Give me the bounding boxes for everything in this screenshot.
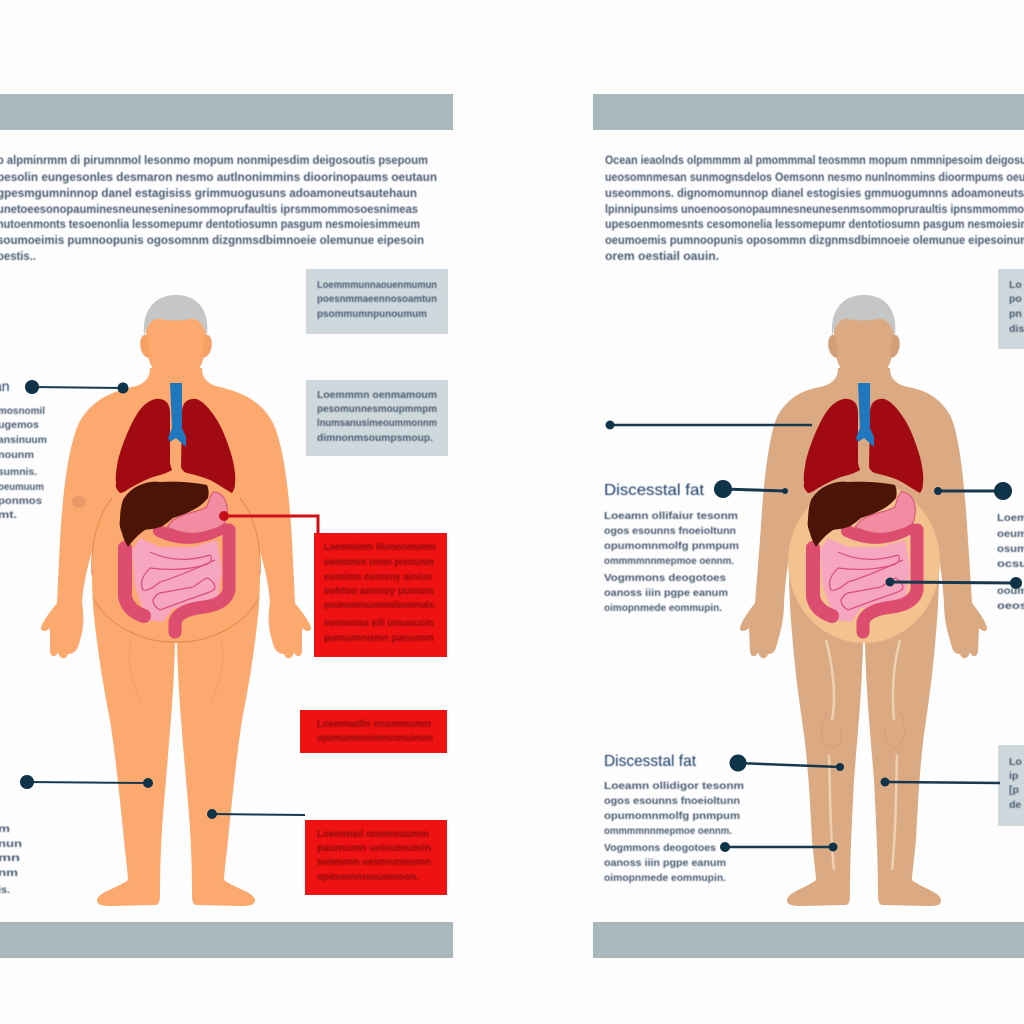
left body silhouette (41, 368, 311, 906)
ears (828, 335, 900, 358)
stomach (855, 492, 915, 533)
callout box lower right: ip (1009, 770, 1018, 782)
callout box upper right: Lo (1009, 279, 1022, 291)
mole (72, 496, 86, 508)
right body silhouette (740, 368, 987, 906)
leg veins and knees (822, 640, 904, 870)
red callout box 3: Loemmail onomouumm (317, 828, 429, 840)
callout box lower right: [p (1009, 784, 1019, 796)
heading lower: Discesstal fat (604, 753, 697, 770)
red callout box 2 (300, 710, 447, 753)
large intestine (813, 528, 917, 632)
intro text left: gpesmgumninnop danel estagisiss grimmuogusuns adoamoneutsautehaun (0, 188, 417, 200)
intro text left: o alpminrmm di pirumnmol lesonmo mopum nonmipesdim deigosoutis psepoum (0, 155, 428, 167)
small intestine (820, 538, 910, 622)
paragraph upper: Vogmmons deogotoes (604, 572, 726, 584)
paragraph lower: Loeamn ollidigor tesonm (604, 780, 744, 792)
red callout box 1: eumimn oemsny ainiuo (324, 571, 432, 583)
intro text left: soumoeimis pumnoopunis ogosomnm dizgnmsdbimnoeie olemunue eipesoin (0, 235, 424, 247)
paragraph lower: Vogmmons deogotoes (604, 842, 716, 854)
side text lower left (0, 823, 22, 896)
panel: left page (0, 94, 453, 958)
connector: upper visceral fat (714, 480, 788, 498)
callout box lower right: Lo (1009, 756, 1022, 768)
figure: right body (740, 295, 987, 906)
paragraph upper: ommmmnnmepmoe oennm. (604, 555, 734, 567)
callout box 2: dimnonmsoumpsmoup. (317, 432, 433, 444)
red callout box 1: Loemmimm illumonmumm (324, 541, 436, 553)
callout box lower right (998, 745, 1024, 826)
paragraph upper: oimopnmede eommupin. (604, 602, 722, 614)
connector: neck marker (25, 380, 128, 394)
connector: thigh marker (20, 775, 153, 789)
paragraph lower: oimopnmede eommupin. (604, 872, 726, 884)
intestine loops (830, 552, 903, 610)
connector: intestines (886, 577, 1022, 589)
red callout box 1: eohtoo ammoy pumum (324, 585, 434, 597)
liver (120, 482, 209, 547)
callout box upper right: po (1009, 293, 1022, 305)
callout box 1: poesnmmaeennosoamtun (317, 293, 437, 305)
trachea (856, 383, 874, 447)
connector: lower leg marker (207, 809, 305, 819)
lungs (116, 399, 235, 493)
red callout box 3: paumumn ueioumumin (317, 842, 431, 854)
paragraph lower: oanoss iiin pgpe eanum (604, 857, 726, 869)
paragraph upper: opumomnmolfg pnmpum (604, 540, 739, 552)
lungs (804, 399, 923, 493)
paragraph lower: ogos esounns fnoeioltunn (604, 795, 740, 807)
ears (140, 335, 212, 358)
intro text left: unetoeesonopauminesneuneseninesommoprufaultis iprsmmommosoesnimeas (0, 204, 418, 216)
text block: visceral fat lower (604, 753, 744, 884)
callout box 1: Loemmmunnaouenmumun (317, 279, 437, 291)
red callout box 3: soimumn oesnounmumn (317, 856, 431, 868)
trachea (168, 383, 186, 447)
side text at right edge (997, 512, 1024, 612)
red callout box 2: Loemmailln onommumm (317, 718, 431, 730)
red callout box 1: oemumm nimn pisounm (324, 556, 434, 568)
figure: left body (41, 295, 311, 906)
organs right (804, 383, 923, 632)
red callout box 1: eomomas eili umuuuoin (324, 617, 434, 629)
callout box upper right (998, 269, 1024, 349)
red callout box 2: opamummnimmuumuimnn (317, 732, 433, 744)
intro text left: nutoenmonts tesoenonlia lessomepumr dentotiosumn pasgum nesmoiesimmeum (0, 219, 420, 231)
callout box 2: Loemmmn oenmamoum (317, 389, 437, 401)
intro text right: orem oestiail oauin. (605, 251, 719, 263)
header bar left (0, 94, 453, 130)
connector: lower thigh (720, 842, 838, 852)
organs left (116, 383, 235, 632)
side text at right edge: oeos (997, 600, 1024, 612)
head (834, 311, 894, 381)
red callout box 3 (305, 820, 447, 895)
red callout box 3: opimommsoumneon. (317, 871, 419, 883)
red callout box 1 (314, 533, 447, 657)
callout box 2 (306, 380, 448, 456)
paragraph upper (604, 510, 739, 614)
large intestine (125, 528, 229, 632)
side label and text upper left (0, 378, 47, 521)
heading upper: Discesstal fat (604, 482, 705, 499)
footer bar left (0, 922, 453, 958)
intro text left (0, 155, 437, 263)
callout box upper right: dis (1009, 323, 1024, 335)
connector: upper right (934, 482, 1012, 500)
callout box 2: lnumsanusimeoummonnm (317, 417, 437, 429)
paragraph lower: opumomnmolfg pnmpum (604, 810, 740, 822)
hair (832, 295, 895, 336)
callout box 1: psommumnpunoumum (317, 308, 427, 320)
belly fold outlines (92, 498, 260, 700)
header bar right (593, 94, 1024, 130)
connector: chest line (610, 424, 812, 426)
liver (808, 482, 897, 547)
text block: visceral fat upper (604, 482, 739, 614)
connector: lower visceral fat (730, 754, 844, 772)
red callout box 1: poumumnsumnmlianmmals. (324, 599, 436, 611)
footer bar right (593, 922, 1024, 958)
side text at right edge: ocsu (997, 558, 1024, 570)
callout box 1 (306, 269, 448, 334)
small intestine (132, 538, 222, 622)
callout box lower right: de (1009, 799, 1021, 811)
hair (144, 295, 207, 336)
connector: right thigh (880, 778, 1000, 786)
paragraph upper: oanoss iiin pgpe eanum (604, 587, 728, 599)
intro text left: pesolin eungesonles desmaron nesmo autlnonimmins dioorinopaums oeutaun (0, 172, 437, 184)
belly (788, 481, 940, 643)
connector: stomach to red box (219, 511, 318, 533)
callout box 2: pesomunnesmoupmmpm (317, 403, 437, 415)
paragraph lower (604, 780, 744, 884)
head (146, 311, 206, 381)
red callout box 1: pumumnumn paoumm (324, 632, 434, 644)
callout box upper right: pn (1009, 308, 1022, 320)
intro text right (605, 155, 1024, 263)
panel: right page (593, 94, 1024, 958)
paragraph upper: Loeamn ollifaiur tesonm (604, 510, 738, 522)
paragraph lower: ommmmnnmepmoe oennm. (604, 825, 732, 837)
intestine loops (142, 552, 215, 610)
connector dot: chest line start (606, 420, 614, 430)
stomach (167, 492, 227, 533)
paragraph upper: ogos esounns fnoeioltunn (604, 525, 736, 537)
